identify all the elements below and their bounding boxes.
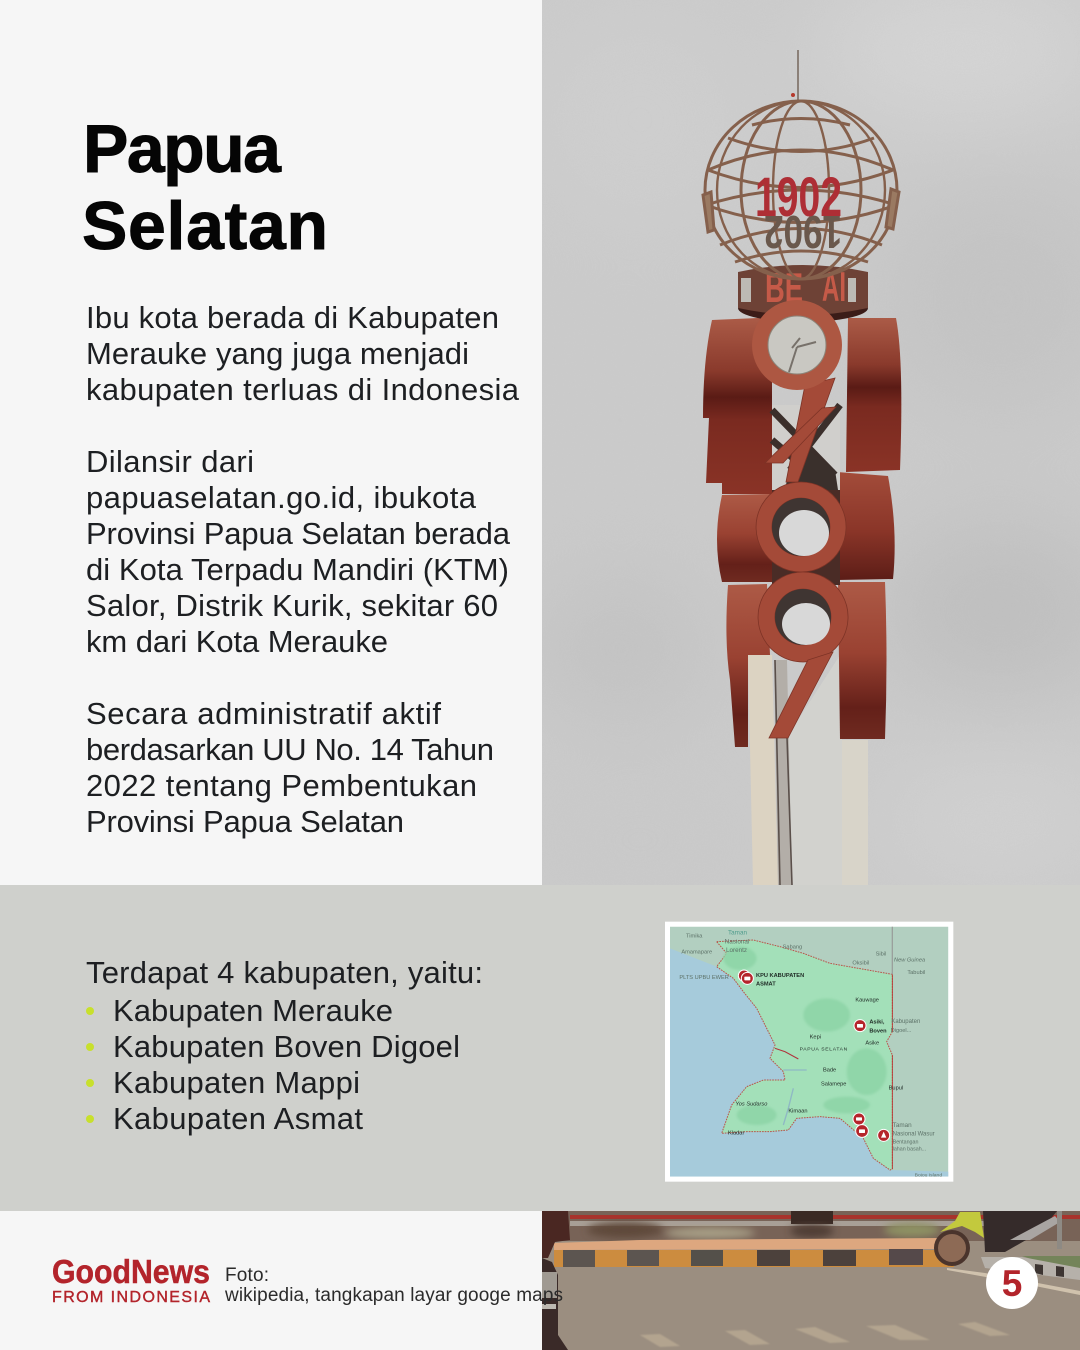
map place names: Salamepe xyxy=(821,1081,846,1087)
map place names: KPU KABUPATEN xyxy=(756,973,804,979)
text block: ibu kota: Merauke yang juga menjadi xyxy=(86,336,469,371)
map pin glyphs xyxy=(744,977,886,1138)
map border line xyxy=(892,974,893,1169)
map white frame xyxy=(665,922,953,1182)
text block: ibu kota: kabupaten terluas di Indonesia xyxy=(86,372,520,407)
list bullets xyxy=(86,1007,94,1123)
text block: administratif: 2022 tentang Pembentukan xyxy=(86,768,477,803)
map labels: New Guinea xyxy=(894,957,925,963)
panel: monument photo xyxy=(530,0,1080,890)
page number badge: 5 xyxy=(1002,1263,1022,1304)
map labels: Bojou Island xyxy=(915,1172,942,1178)
list items: Kabupaten Asmat xyxy=(113,1101,363,1136)
map place names: Kauwage xyxy=(855,997,879,1003)
monument red blocks xyxy=(703,318,901,747)
map rivers xyxy=(775,1048,807,1125)
globe band xyxy=(738,263,868,322)
logo: GoodNews from Indonesia: FROM INDONESIA xyxy=(52,1289,210,1306)
page number badge xyxy=(986,1257,1038,1309)
text block: dilansir: Provinsi Papua Selatan berada xyxy=(86,516,511,551)
garden behind curb xyxy=(542,1211,1080,1241)
photo sky xyxy=(530,0,1080,890)
globe frame xyxy=(703,50,899,279)
globe band: AI xyxy=(822,263,846,310)
text block: dilansir: Salor, Distrik Kurik, sekitar 60 xyxy=(86,588,498,623)
map place names: Boven xyxy=(869,1028,887,1034)
text block: administratif xyxy=(86,696,494,839)
map labels: Bentangan xyxy=(893,1140,918,1146)
road surface xyxy=(542,1241,1080,1350)
map terrain shading xyxy=(723,947,887,1125)
map labels: Nasional xyxy=(725,938,749,945)
text block: ibu kota xyxy=(86,300,520,407)
map place names: Bupul xyxy=(889,1085,903,1091)
map content xyxy=(670,927,948,1178)
map labels: Taman xyxy=(893,1122,912,1129)
parked motorbike at left edge xyxy=(542,1211,570,1350)
text block: dilansir: papuaselatan.go.id, ibukota xyxy=(86,480,477,515)
map place names xyxy=(728,973,903,1136)
map place names: ASMAT xyxy=(756,982,776,988)
map place names: PAPUA SELATAN xyxy=(800,1047,848,1053)
map labels: Amamapare xyxy=(681,950,712,956)
text block: dilansir: di Kota Terpadu Mandiri (KTM) xyxy=(86,552,509,587)
list items: Kabupaten Mappi xyxy=(113,1065,360,1100)
map place names: Kladar xyxy=(728,1130,744,1136)
monument ring holes xyxy=(772,498,831,645)
map location pins xyxy=(738,970,890,1141)
map place names: Asiki, xyxy=(869,1019,885,1025)
map labels: Nasional Wasur xyxy=(893,1132,935,1138)
text block: ibu kota: Ibu kota berada di Kabupaten xyxy=(86,300,499,335)
map labels: Sibil xyxy=(876,951,886,957)
map labels: lahan basah... xyxy=(893,1146,926,1152)
globe band: BE xyxy=(765,264,803,311)
map labels: Digoel... xyxy=(891,1028,912,1034)
list items: Kabupaten Boven Digoel xyxy=(113,1029,460,1064)
logo: GoodNews from Indonesia: GoodNews xyxy=(52,1253,210,1290)
list heading: Terdapat 4 kabupaten, yaitu: xyxy=(86,955,483,990)
motorcycle xyxy=(936,1211,1062,1264)
monument pillars xyxy=(748,652,868,885)
map labels: PLTS UPBU EWER xyxy=(679,975,729,981)
map labels xyxy=(679,930,942,1178)
map province land xyxy=(717,940,892,1170)
title xyxy=(82,111,328,264)
grass and road kerb at right xyxy=(947,1256,1080,1295)
globe year 1902 xyxy=(757,177,840,248)
map place names: Bade xyxy=(823,1067,836,1073)
title: Papua xyxy=(83,111,282,187)
monument numerals 1969 xyxy=(756,378,848,738)
text block: administratif: Provinsi Papua Selatan xyxy=(86,804,404,839)
panel: footer road photo xyxy=(542,1211,1080,1350)
photo credit: Foto: xyxy=(225,1265,269,1286)
map place names: Asike xyxy=(865,1041,879,1047)
map labels: Taman xyxy=(728,930,747,937)
striped curb xyxy=(554,1238,954,1267)
map labels: Timika xyxy=(686,933,703,939)
text block: administratif: berdasarkan UU No. 14 Tahun xyxy=(86,732,494,767)
list items xyxy=(113,993,460,1136)
list: kabupaten xyxy=(86,955,483,1136)
map place names: Kepi xyxy=(810,1034,821,1040)
map labels: Lorentz xyxy=(726,947,747,954)
photo credit xyxy=(224,1265,563,1306)
photo credit: wikipedia, tangkapan layar googe maps xyxy=(224,1285,563,1306)
text block: administratif: Secara administratif aktif xyxy=(86,696,441,731)
text block: dilansir: km dari Kota Merauke xyxy=(86,624,388,659)
faded road markings xyxy=(640,1322,1010,1347)
map place names: Kimaan xyxy=(788,1108,808,1114)
title: Selatan xyxy=(82,188,328,264)
globe year 1902: 1902 xyxy=(764,206,842,258)
map labels: Kabupaten xyxy=(891,1019,920,1025)
panel: kabupaten band xyxy=(0,885,1080,1211)
map labels: Sabang xyxy=(783,944,802,950)
map neighbouring land xyxy=(670,927,948,1177)
map labels: Tabubil xyxy=(907,970,925,976)
map place names: Yos Sudarso xyxy=(735,1101,767,1107)
logo: GoodNews from Indonesia xyxy=(52,1253,210,1306)
monument clock xyxy=(752,300,842,390)
list items: Kabupaten Merauke xyxy=(113,993,393,1028)
text block: dilansir: Dilansir dari xyxy=(86,444,254,479)
text block: dilansir xyxy=(86,444,511,659)
map labels: Oksibil xyxy=(852,961,869,967)
map sea xyxy=(670,948,948,1177)
map: Papua Selatan screenshot xyxy=(665,922,953,1182)
globe year 1902: 1902 xyxy=(755,165,842,228)
